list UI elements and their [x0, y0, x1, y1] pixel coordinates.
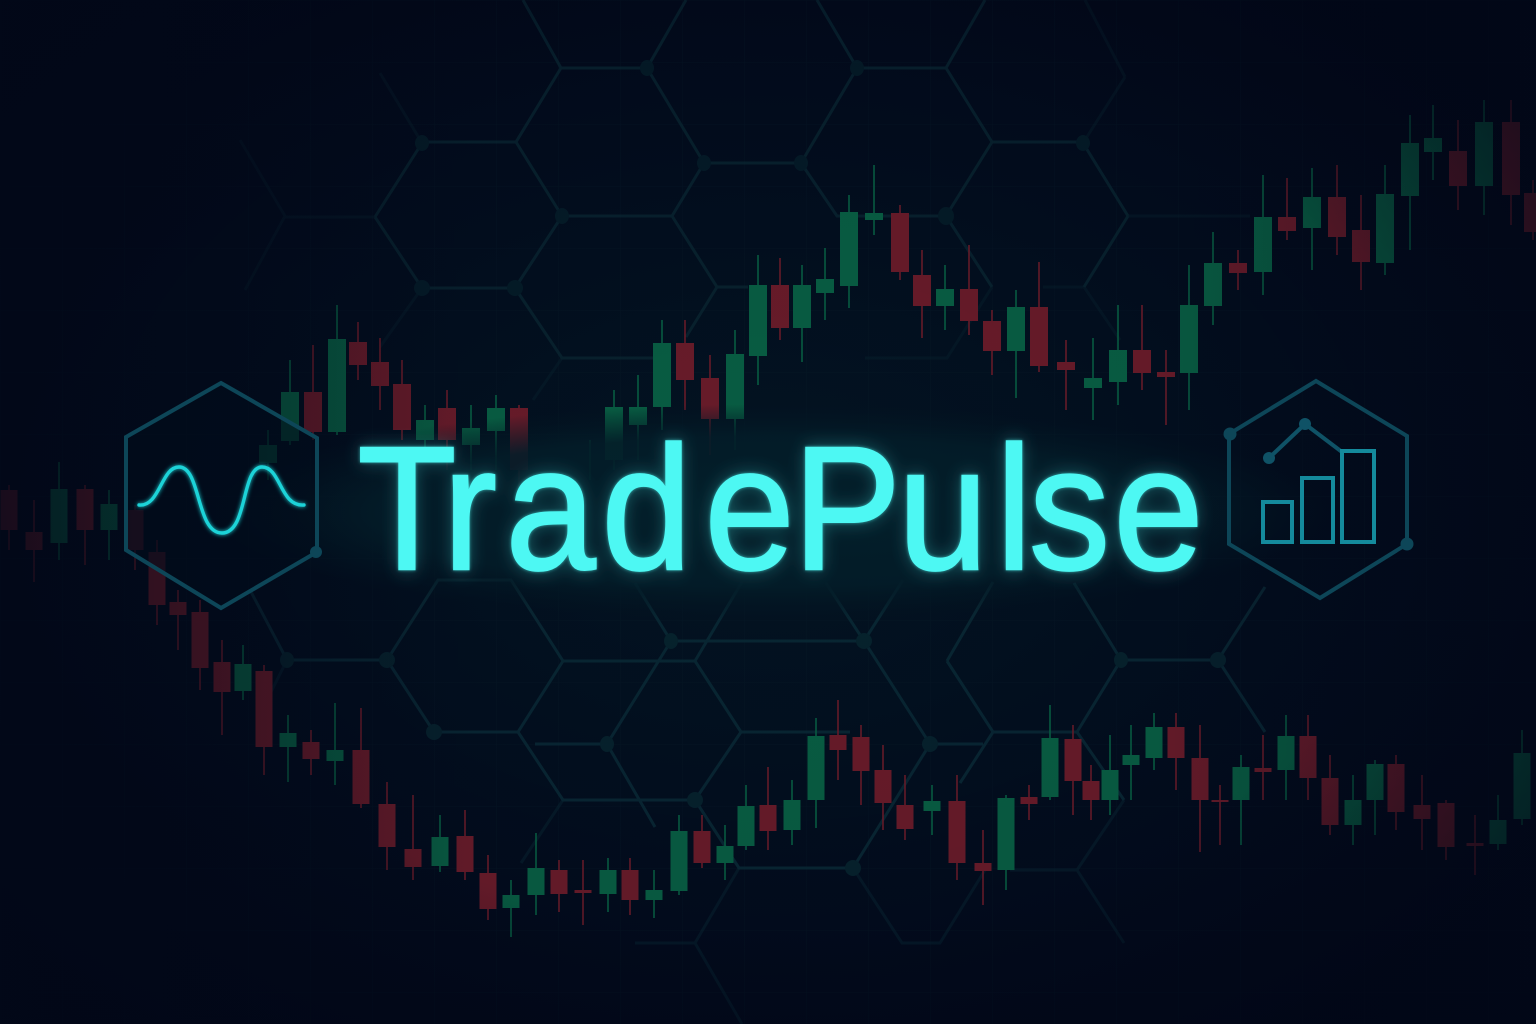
left hexagon wave icon — [126, 383, 322, 608]
candlestick chart: lower series — [9, 462, 1522, 937]
hexagon network: top — [240, 0, 1250, 400]
right hexagon bar chart icon — [1224, 381, 1414, 598]
title: TradePulse: TradePulse — [358, 410, 1204, 606]
center glow behind title — [150, 400, 1390, 625]
hexagon network: bottom — [250, 580, 1265, 1024]
candlestick chart: upper series — [268, 100, 1533, 490]
